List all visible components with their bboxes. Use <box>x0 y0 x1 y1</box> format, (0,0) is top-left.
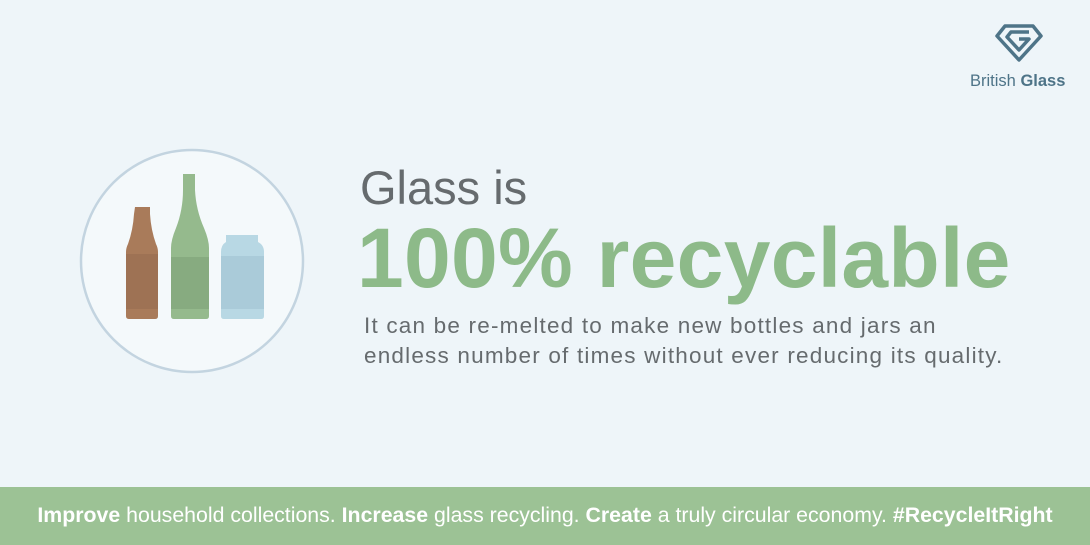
heading: 100% recyclable: 100% recyclable <box>357 211 1011 305</box>
icon: brown bottle <box>126 207 158 319</box>
logo: British Glass <box>970 24 1065 90</box>
icon: green bottle <box>171 174 209 319</box>
footer banner: Improve household collections. Increase glass recycling. Create a truly circular economy. #RecycleItRight <box>37 503 1053 527</box>
body text: It can be re-melted to make new bottles and jars an <box>364 313 937 338</box>
heading: Glass is: Glass is <box>360 161 527 214</box>
logo text: British Glass <box>970 72 1065 90</box>
body text: endless number of times without ever reducing its quality. <box>364 343 1003 368</box>
icon: jar <box>221 235 264 319</box>
footer banner <box>0 487 1090 545</box>
illustration: bottles in circle <box>80 148 304 374</box>
body text <box>364 313 1003 368</box>
icon: logo mark <box>995 24 1043 62</box>
